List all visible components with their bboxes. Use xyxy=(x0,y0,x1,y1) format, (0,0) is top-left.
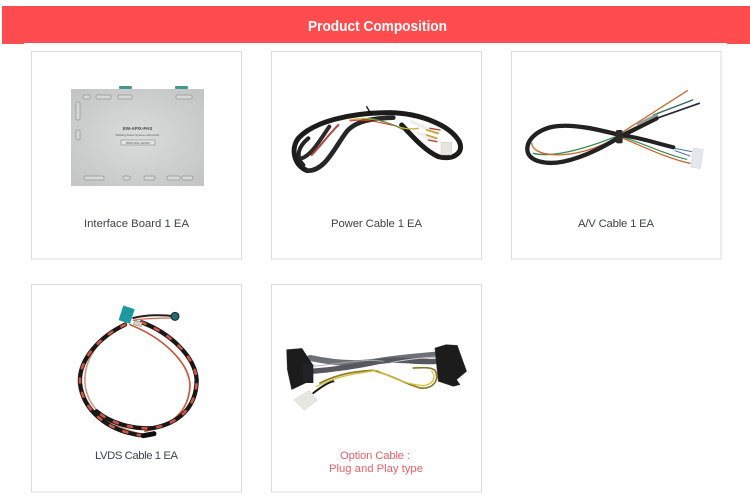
label: option cable: Plug and Play type xyxy=(329,463,423,475)
icon: LVDS cable photo xyxy=(80,306,197,436)
icon: interface board photo xyxy=(71,86,204,186)
label: A/V Cable 1 EA xyxy=(578,218,654,230)
panel: power cable xyxy=(272,52,482,259)
icon: power cable photo xyxy=(294,107,461,171)
label: LVDS Cable 1 EA xyxy=(95,450,178,462)
title: Product Composition xyxy=(308,19,447,35)
icon: A/V cable photo xyxy=(527,91,703,169)
icon: interface board photo: Parking Assist System with Color xyxy=(116,133,159,137)
label: Power Cable 1 EA xyxy=(331,218,422,230)
panel: interface board xyxy=(32,52,242,259)
icon: option cable photo xyxy=(287,345,467,410)
header banner xyxy=(2,6,750,44)
label: option cable: Option Cable : xyxy=(340,450,410,462)
panel: A/V cable xyxy=(512,52,721,259)
label: Interface Board 1 EA xyxy=(84,218,189,230)
panel: LVDS cable xyxy=(32,284,242,492)
icon: interface board photo: EW-APIX-PAS xyxy=(123,126,152,131)
icon: interface board photo: BMW-PAS-1920X0 xyxy=(126,141,150,145)
label: option cable xyxy=(329,450,423,475)
panel: option cable xyxy=(272,284,482,492)
